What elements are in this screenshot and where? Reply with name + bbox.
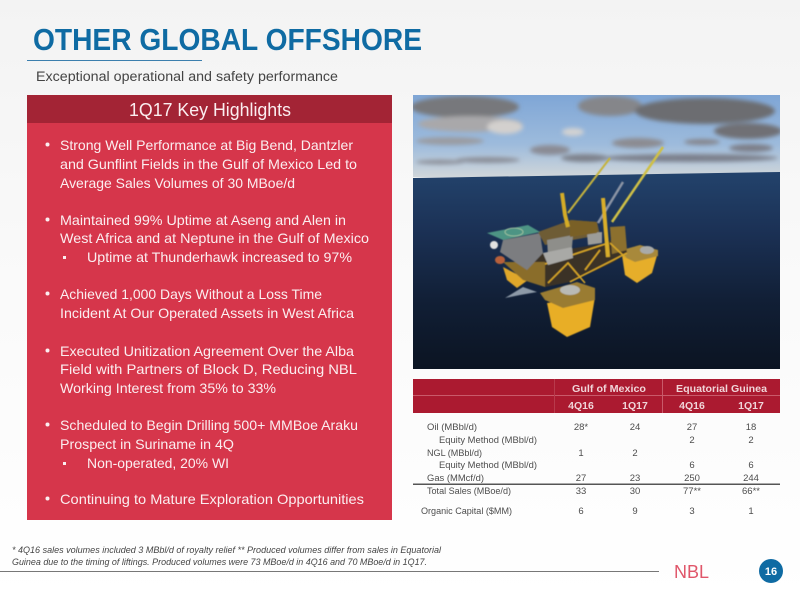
- panel: 1Q17 key highlights: [27, 95, 392, 520]
- data table: [413, 379, 780, 517]
- lower grey module: [500, 233, 543, 270]
- table header: [413, 379, 780, 413]
- table row: gas: Gas (MMcf/d): [427, 473, 484, 483]
- table row: oil equity method: [439, 435, 754, 446]
- table row: NGL equity method: Equity Method (MBbl/d): [439, 460, 537, 470]
- subtitle: Exceptional operational and safety performance: [36, 69, 338, 84]
- table row: oil: 24: [630, 422, 640, 433]
- bullet: uptime: Uptime at Thunderhawk increased to 97%: [87, 249, 352, 265]
- bullet: safety: Incident At Our Operated Assets in West Africa: [60, 305, 354, 321]
- table row: total sales: 77**: [683, 486, 701, 497]
- table row: oil equity method: 2: [689, 435, 695, 446]
- table row: organic capital: 1: [748, 506, 754, 517]
- bullet: unitization: [46, 343, 357, 396]
- bullet: well performance: [46, 137, 357, 191]
- bullet: Araku drilling: Non-operated, 20% WI: [87, 455, 229, 471]
- platform: [487, 147, 663, 337]
- bullet: well performance: and Gunflint Fields in the Gulf of Mexico Led to: [60, 156, 357, 172]
- table row: gas: [427, 473, 759, 484]
- page number badge: [759, 559, 783, 583]
- bullet: safety: Achieved 1,000 Days Without a Loss Time: [60, 286, 322, 302]
- right column: [622, 252, 658, 283]
- table row: total sales: Total Sales (MBoe/d): [427, 486, 511, 496]
- bullet: unitization: Working Interest from 35% to 33%: [60, 380, 276, 396]
- table header: Gulf of Mexico: [572, 383, 646, 395]
- table row: gas: 23: [630, 473, 640, 484]
- table row: oil: 28*: [574, 422, 588, 433]
- table row: oil: 18: [746, 422, 756, 433]
- table row: NGL: 1: [578, 448, 584, 459]
- table header: 1Q17: [738, 400, 764, 412]
- footnote: * 4Q16 sales volumes included 3 MBbl/d of royalty relief ** Produced volumes differ from sales in Equatorial: [12, 545, 442, 555]
- table row: total sales: 30: [630, 486, 640, 497]
- bullet: Araku drilling: [46, 417, 358, 471]
- bullet: Araku drilling: Prospect in Suriname in 4Q: [60, 436, 234, 452]
- table row: gas: 250: [684, 473, 700, 484]
- table row: organic capital: 9: [632, 506, 638, 517]
- bullet: unitization: Executed Unitization Agreement Over the Alba: [60, 343, 354, 359]
- table row: organic capital: 6: [578, 506, 584, 517]
- table row: NGL: NGL (MBbl/d): [427, 448, 482, 458]
- panel header: 1Q17 Key Highlights: [129, 100, 291, 120]
- left column: [503, 267, 528, 288]
- table row: NGL: 2: [632, 448, 638, 459]
- bullet: uptime: West Africa and at Neptune in the Gulf of Mexico: [60, 230, 369, 246]
- table row: oil: [427, 422, 756, 433]
- table row: NGL: [427, 448, 638, 459]
- table header: 4Q16: [679, 400, 705, 412]
- table row: total sales: 33: [576, 486, 586, 497]
- bullet: exploration: Continuing to Mature Exploration Opportunities: [60, 491, 364, 507]
- table header: Equatorial Guinea: [676, 383, 767, 395]
- table header: 1Q17: [622, 400, 648, 412]
- footnote: [12, 545, 442, 567]
- table row: oil: 27: [687, 422, 697, 433]
- photo: offshore platform at sea: [411, 95, 782, 369]
- page number badge: 16: [765, 566, 777, 578]
- bullet: safety: [46, 286, 354, 321]
- truss section: [534, 240, 628, 288]
- table row: oil equity method: Equity Method (MBbl/d): [439, 435, 537, 445]
- table row: NGL equity method: 6: [748, 460, 754, 471]
- table row: NGL equity method: 6: [689, 460, 695, 471]
- bullet: Araku drilling: Scheduled to Begin Drilling 500+ MMBoe Araku: [60, 417, 358, 433]
- table header: 4Q16: [568, 400, 594, 412]
- helideck: [487, 225, 540, 240]
- table row: gas: 244: [743, 473, 759, 484]
- upper modules: [538, 220, 600, 245]
- title: OTHER GLOBAL OFFSHORE: [33, 22, 422, 57]
- table row: organic capital: Organic Capital ($MM): [421, 506, 512, 516]
- logo: NBL: NBL: [674, 562, 709, 582]
- bullet: well performance: Strong Well Performance at Big Bend, Dantzler: [60, 137, 353, 153]
- panel header: [27, 95, 392, 123]
- table row: total sales: 66**: [742, 486, 760, 497]
- front column: [547, 297, 595, 337]
- table row: oil equity method: 2: [748, 435, 754, 446]
- hull wake: [505, 287, 537, 298]
- table row: oil: Oil (MBbl/d): [427, 422, 477, 432]
- bullet: uptime: Maintained 99% Uptime at Aseng and Alen in: [60, 212, 346, 228]
- cranes: [598, 182, 623, 223]
- bullet: unitization: Field with Partners of Block D, Reducing NBL: [60, 361, 357, 377]
- table row: organic capital: [421, 506, 754, 517]
- table row: organic capital: 3: [689, 506, 695, 517]
- table row: total sales: [427, 486, 760, 497]
- bullet: well performance: Average Sales Volumes of 30 MBoe/d: [60, 175, 295, 191]
- table row: NGL equity method: [439, 460, 754, 471]
- footnote: Guinea due to the timing of liftings. Produced volumes were 73 MBoe/d in 4Q16 and 70 MBoe/d in 1Q17.: [12, 557, 427, 567]
- bullet: uptime: [46, 212, 369, 265]
- table row: gas: 27: [576, 473, 586, 484]
